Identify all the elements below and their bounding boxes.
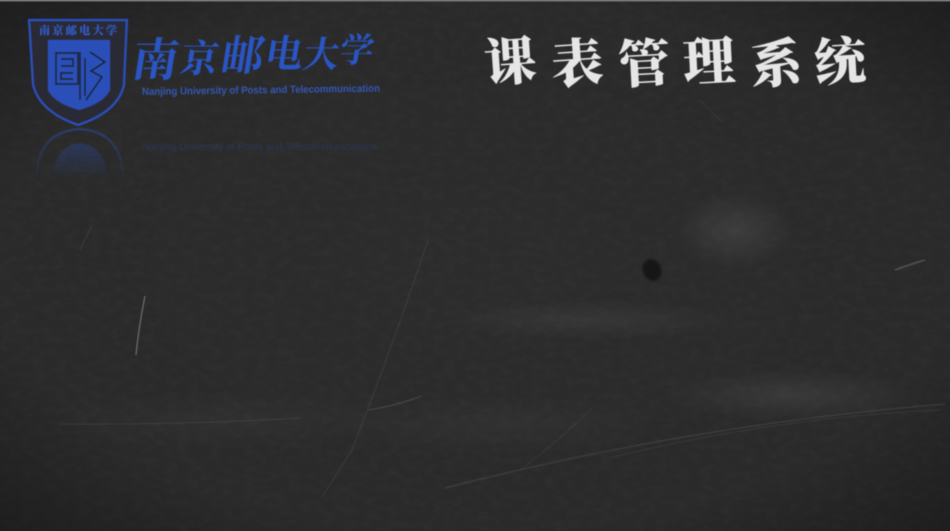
university name <box>128 22 380 98</box>
chinese name: 南 <box>128 24 184 90</box>
chinese name: 学 <box>337 23 378 72</box>
ink spot <box>640 256 664 284</box>
university crest <box>29 20 127 125</box>
title: 表 <box>549 34 605 96</box>
title: 统 <box>813 32 872 93</box>
title: 课 <box>482 32 538 94</box>
logo reflection <box>37 129 377 180</box>
chinese name: 邮 <box>218 22 269 83</box>
title: 理 <box>682 33 737 93</box>
chinese name: 京 <box>177 28 224 83</box>
title <box>482 32 872 96</box>
title: 管 <box>617 35 672 95</box>
crest emblem <box>56 52 105 100</box>
english name: Nanjing University of Posts and Telecommunication <box>142 83 380 98</box>
title: 系 <box>748 34 806 96</box>
crest top text: 南京邮电大学 <box>39 22 117 38</box>
crest inner shield <box>48 40 110 110</box>
chinese name: 大 <box>300 26 344 78</box>
chinese name: 电 <box>262 23 308 78</box>
logo reflection: Nanjing University of Posts and Telecommunications <box>142 142 377 153</box>
